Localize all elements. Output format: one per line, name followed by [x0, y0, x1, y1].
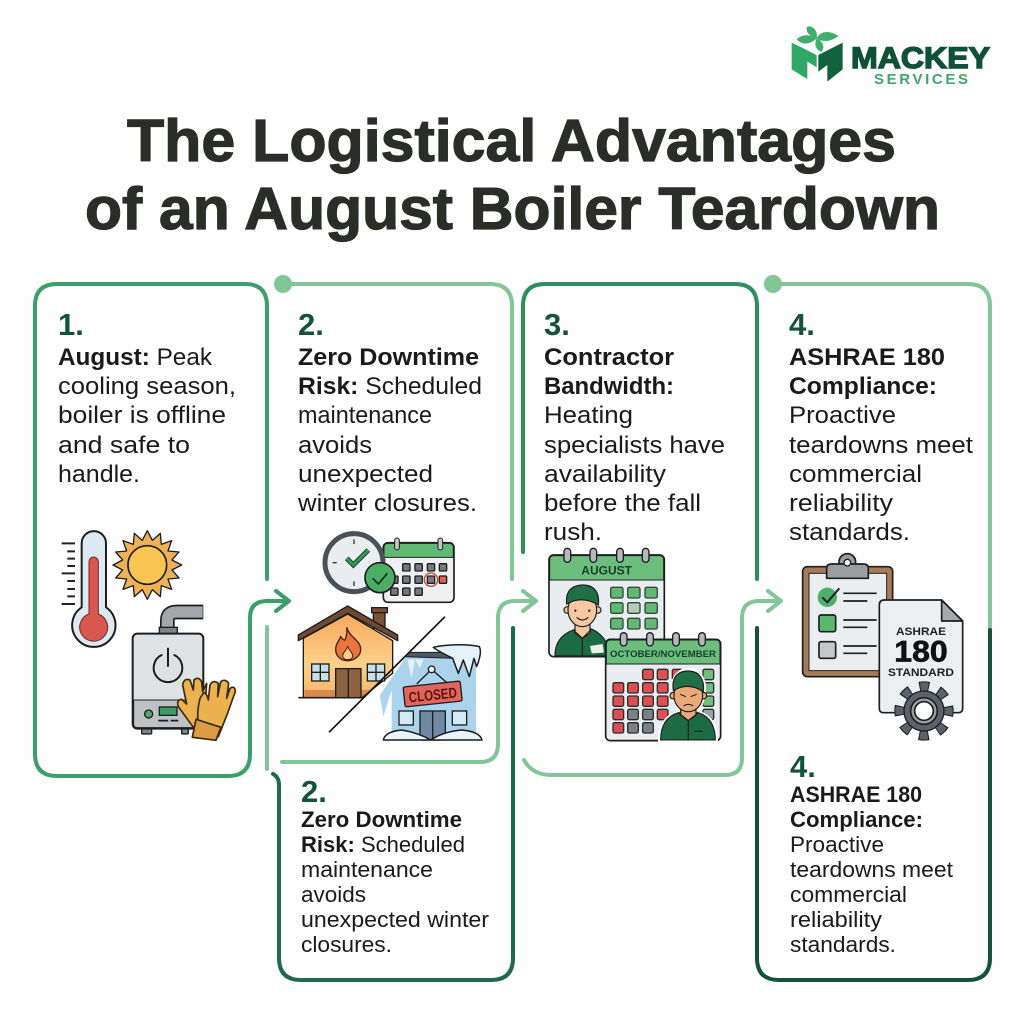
- panel 2 text: maintenance: [298, 402, 432, 429]
- icon: diagonal divider: [329, 617, 445, 732]
- panel 4 duplicate lower text: reliability: [790, 907, 882, 932]
- panel 4 text: Proactive: [789, 402, 896, 429]
- panel 2 text: unexpected: [298, 461, 433, 488]
- icon: August and October/November calendars with technician: [549, 548, 721, 741]
- panel 4 text: 4.: [789, 307, 815, 342]
- panel 2: Zero Downtime Risk: [267, 275, 536, 769]
- panel 3 text: availability: [544, 461, 666, 488]
- title: The Logistical Advantages: [127, 108, 896, 174]
- icon: frozen closed building: CLOSED: [408, 685, 458, 706]
- icon: thermometer, sun, offline boiler and gloves: [62, 531, 235, 740]
- lower card text: Zero Downtime: [301, 807, 462, 832]
- panel 1 text: cooling season,: [58, 373, 236, 400]
- panel 3 text: Bandwidth:: [544, 373, 674, 400]
- panel 4 duplicate lower text: Proactive: [790, 832, 884, 857]
- panel 3 text: Contractor: [544, 344, 674, 371]
- panel 4 text: [789, 307, 973, 546]
- panel 1 text: and safe to: [58, 432, 190, 459]
- panel 3 frame and arrow: [523, 284, 781, 775]
- title: [85, 108, 940, 242]
- panel 2 text: [297, 307, 482, 517]
- panel 1 text: [58, 307, 236, 488]
- panel 3 text: before the fall: [544, 490, 701, 517]
- panel 4 duplicate lower text: 4.: [790, 749, 816, 784]
- panel 4 text: standards.: [789, 519, 910, 546]
- panel 2 text: 2.: [298, 307, 324, 342]
- panel 4 text: commercial: [789, 461, 922, 488]
- icon: checklist clipboard, ASHRAE 180 standard document and gear: [803, 554, 963, 739]
- icon: gloves: [178, 678, 235, 740]
- panel 4 duplicate lower text: standards.: [790, 932, 896, 957]
- lower card text: closures.: [301, 932, 392, 957]
- title: of an August Boiler Teardown: [85, 176, 940, 242]
- panel 4 duplicate lower text: Compliance:: [790, 807, 923, 832]
- panel 4 duplicate lower text: teardowns meet: [790, 857, 953, 882]
- lower card text: 2.: [301, 774, 327, 809]
- panel 2 frame and arrow: [267, 275, 536, 769]
- icon: ASHRAE 180 standard document: 180: [894, 636, 948, 669]
- icon: August calendar: [549, 548, 664, 657]
- panel 3 text: [544, 307, 725, 546]
- icon: thermometer: [62, 531, 115, 647]
- icon: calendar: [383, 538, 454, 602]
- panel 1 text: handle.: [58, 461, 140, 488]
- panel 3 text: Heating: [544, 402, 633, 429]
- logo wordmark: MACKEY: [851, 42, 990, 75]
- lower card text: [301, 774, 489, 957]
- icon: warm house with flame: [298, 606, 398, 698]
- panel 3 text: specialists have: [544, 432, 725, 459]
- panel 4 frame: [757, 275, 990, 980]
- icon: gear: [896, 683, 952, 739]
- panel 1 text: boiler is offline: [58, 402, 226, 429]
- panel 3 text: 3.: [544, 307, 570, 342]
- panel 4 text: reliability: [789, 490, 893, 517]
- panel 1 frame and arrow: [35, 284, 289, 776]
- icon: clipboard checklist: [803, 554, 893, 677]
- lower card frame: [273, 628, 513, 980]
- panel 3 text: rush.: [544, 519, 602, 546]
- panel 4 text: ASHRAE 180: [789, 344, 945, 371]
- panel 4 text: teardowns meet: [789, 432, 973, 459]
- icon: August calendar: AUGUST: [581, 564, 632, 577]
- icon: smiling technician: [555, 585, 609, 656]
- panel 3: Contractor Bandwidth: [523, 284, 781, 775]
- icon: frozen closed building: [380, 645, 482, 740]
- icon: clock with check: [325, 534, 395, 593]
- panel 4: ASHRAE 180 Compliance: [757, 275, 990, 980]
- panel 1: August: [35, 284, 289, 776]
- lower card text: unexpected winter: [301, 907, 489, 932]
- lower card text: maintenance: [301, 857, 433, 882]
- panel 1 text: August: Peak: [58, 344, 213, 371]
- icon: sun: [113, 531, 182, 599]
- logo: Mackey Services: [792, 26, 990, 88]
- icon: ASHRAE 180 standard document: ASHRAE: [896, 626, 946, 638]
- logo subtitle: SERVICES: [874, 71, 968, 88]
- panel 4 text: Compliance:: [789, 373, 937, 400]
- icon: tired technician: [660, 670, 716, 740]
- panel 4 duplicate lower text: ASHRAE 180: [790, 782, 922, 807]
- icon: clock, calendar, warm house and frozen closed building: [298, 534, 482, 740]
- icon: logo cube with fan: [792, 26, 843, 82]
- icon: boiler: [133, 612, 203, 734]
- panel 2 text: avoids: [298, 432, 372, 459]
- panel 4 duplicate lower text: [790, 749, 953, 957]
- panel 4 duplicate lower text: commercial: [790, 882, 907, 907]
- icon: October/November calendar: [606, 633, 721, 741]
- panel 2 text: Zero Downtime: [298, 344, 479, 371]
- lower card text: Risk: Scheduled: [301, 832, 465, 857]
- icon: ASHRAE 180 standard document: STANDARD: [888, 667, 954, 679]
- icon: ASHRAE 180 standard document: [879, 600, 963, 713]
- panel 2 text: winter closures.: [297, 490, 477, 517]
- panel 1 text: 1.: [58, 307, 84, 342]
- panel 2 duplicate lower card: [273, 628, 513, 980]
- icon: October/November calendar: OCTOBER/NOVEMBER: [610, 649, 717, 659]
- panel 2 text: Risk: Scheduled: [298, 373, 482, 400]
- lower card text: avoids: [301, 882, 366, 907]
